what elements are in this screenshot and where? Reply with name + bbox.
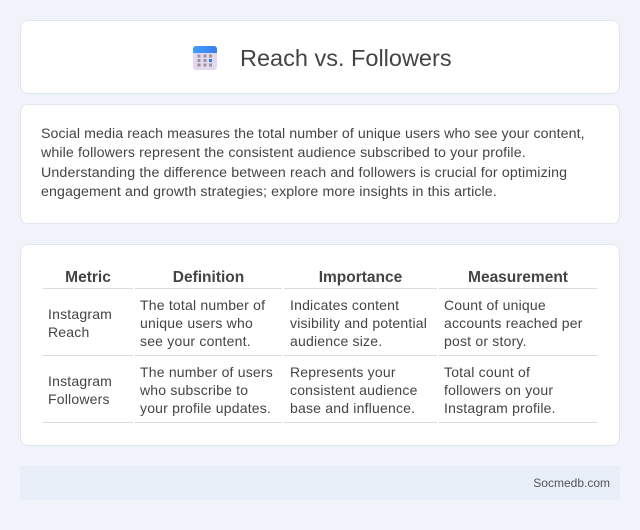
row 1 importance: audience size. [290, 333, 382, 349]
row 1 importance [290, 297, 427, 349]
row 2 measurement: Instagram profile. [444, 400, 556, 416]
intro paragraph: Understanding the difference between reach and followers is crucial for optimizing [41, 165, 567, 181]
icon: calendar [193, 46, 217, 70]
row 1 measurement: Count of unique [444, 297, 546, 313]
header: Metric: Metric [65, 269, 111, 286]
footer text: Socmedb.com [533, 476, 610, 490]
intro paragraph: Social media reach measures the total number of unique users who see your content, [41, 126, 585, 142]
row 1 measurement: accounts reached per [444, 315, 583, 331]
row 2 definition: who subscribe to [140, 382, 248, 398]
footer bar [20, 466, 620, 500]
intro paragraph: engagement and growth strategies; explore more insights in this article. [41, 184, 497, 200]
row 1 metric: Instagram [48, 306, 112, 322]
row 1 definition: unique users who [140, 315, 253, 331]
heading: Reach vs. Followers [240, 45, 452, 71]
row 1 definition: see your content. [140, 333, 251, 349]
panel: title card [20, 20, 620, 94]
row 2 definition [140, 364, 273, 416]
row 1 measurement [444, 297, 583, 349]
row 2 metric [48, 373, 112, 407]
intro paragraph: while followers represent the consistent audience subscribed to your profile. [41, 145, 526, 161]
header: Definition: Definition [173, 269, 244, 286]
header: Measurement: Measurement [468, 269, 568, 286]
row 2 measurement: followers on your [444, 382, 553, 398]
intro paragraph [41, 126, 585, 200]
row 1 definition: The total number of [140, 297, 265, 313]
row 2 importance: Represents your [290, 364, 396, 380]
row 1 metric: Reach [48, 324, 89, 340]
row 2 metric: Followers [48, 391, 110, 407]
row 2 importance: base and influence. [290, 400, 415, 416]
row 1 importance: visibility and potential [290, 315, 427, 331]
row 2 metric: Instagram [48, 373, 112, 389]
row 2 importance: consistent audience [290, 382, 418, 398]
row 2 definition: The number of users [140, 364, 273, 380]
row 2 measurement: Total count of [444, 364, 530, 380]
panel: table card [20, 244, 620, 446]
row 1 importance: Indicates content [290, 297, 399, 313]
header: Importance: Importance [319, 269, 402, 286]
row 2 definition: your profile updates. [140, 400, 271, 416]
row 1 measurement: post or story. [444, 333, 527, 349]
row 2 measurement [444, 364, 556, 416]
panel: intro text [20, 104, 620, 224]
row 1 metric [48, 306, 112, 340]
row 2 importance [290, 364, 418, 416]
row 1 definition [140, 297, 266, 349]
